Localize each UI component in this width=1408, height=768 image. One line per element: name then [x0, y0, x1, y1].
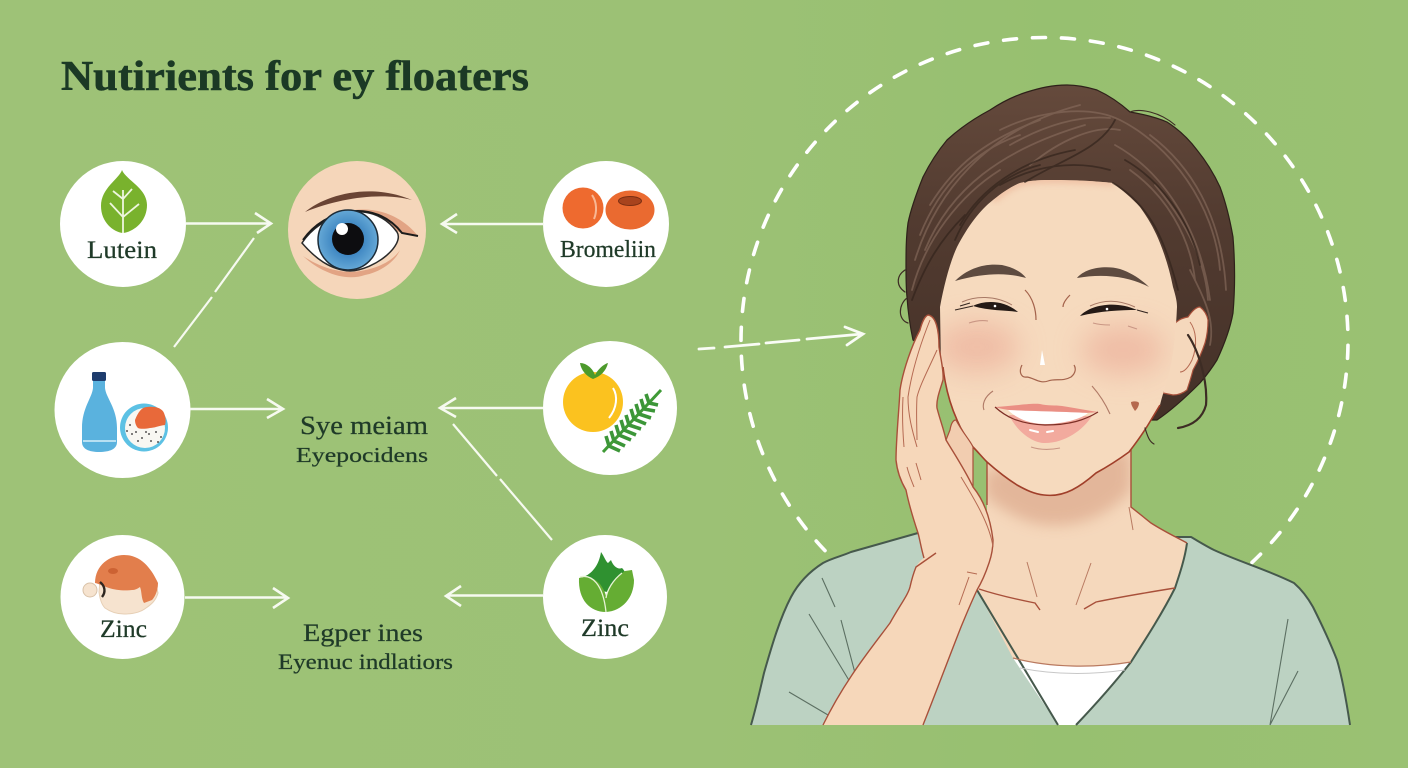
- icon: blue bottle: [82, 372, 117, 452]
- icon: eye drawing: [302, 191, 418, 277]
- illustration: woman: [751, 85, 1350, 725]
- thumb behind chin: [946, 420, 973, 487]
- back hair: [906, 85, 1234, 420]
- mouth: [995, 404, 1098, 449]
- panel: mushroom zinc: [60, 535, 184, 659]
- panel: bottle and capsule: [54, 342, 190, 478]
- text block: middle: [296, 411, 428, 467]
- label: zinc: Zinc: [581, 615, 629, 642]
- shirt: [751, 533, 1350, 725]
- icon: mushroom: [83, 555, 158, 614]
- nose: [1020, 290, 1075, 382]
- panel: lutein: [60, 161, 186, 287]
- icon: citrus fruit: [563, 363, 623, 432]
- eyes: [955, 297, 1148, 329]
- undershirt: [1013, 658, 1131, 725]
- arrow: bottle to eye diagonal: [174, 238, 254, 347]
- label: zinc: Zinc: [100, 616, 147, 643]
- icon: orange fruit halves: [562, 188, 654, 230]
- arrow: dashed to face: [699, 327, 863, 349]
- neck shadow: [985, 450, 1131, 525]
- icon: rosemary sprig: [603, 390, 661, 452]
- text block: bottom: Egper ines: [303, 620, 423, 647]
- arrow: citrus to syndrome: [440, 398, 543, 417]
- text block: bottom: [278, 620, 453, 674]
- text block: bottom: Eyenuc indlatiors: [278, 649, 453, 674]
- text block: middle: Eyepocidens: [296, 443, 428, 467]
- smile lines: [983, 386, 1110, 414]
- hand and forearm: [823, 315, 993, 725]
- icon: capsule bowl: [120, 404, 168, 452]
- dashed circle: [741, 38, 1348, 562]
- arrow: mushroom to egg: [185, 588, 288, 608]
- arrow: bromeliin to eye: [442, 214, 544, 233]
- panel: eye: [288, 161, 426, 299]
- face: [940, 180, 1177, 495]
- blush cheeks: [935, 322, 1165, 375]
- panel: bromeliin: [543, 161, 669, 287]
- icon: green leaves: [579, 552, 634, 612]
- title: Nutirients for ey floaters: [61, 53, 529, 100]
- eyebrows: [955, 265, 1149, 287]
- arrow: lutein to eye: [186, 213, 271, 233]
- mole: [1131, 401, 1139, 411]
- text block: middle: Sye meiam: [300, 411, 428, 440]
- arrow: bottle to syndrome: [190, 399, 283, 418]
- arrow: zinc to citrus diagonal: [453, 424, 552, 540]
- arrow: zinc to egg: [446, 586, 543, 606]
- hair strands: [898, 105, 1226, 444]
- panel: leafy zinc: [543, 535, 667, 659]
- icon: leaf: [101, 170, 147, 233]
- label: bromeliin: Bromeliin: [560, 237, 656, 263]
- neck and chest: [977, 445, 1187, 666]
- panel: citrus and rosemary: [543, 341, 677, 475]
- right ear: [1163, 307, 1208, 395]
- label: lutein: Lutein: [87, 237, 158, 264]
